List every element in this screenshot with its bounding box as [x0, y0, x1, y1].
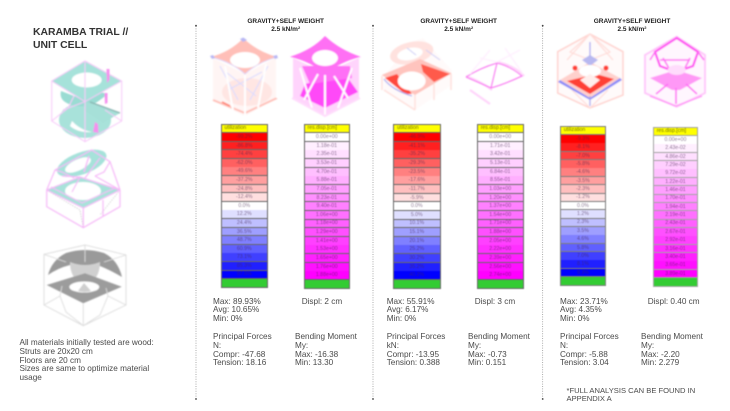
legend: column 1 displacement: 1.29e+00 [316, 229, 338, 235]
footnote: *FULL ANALYSIS CAN BE FOUND IN APPENDIX A [566, 386, 695, 403]
legend: column 1 displacement: 1.65e+00 [316, 255, 338, 261]
legend: column 2 displacement: res.disp.[cm] [481, 125, 510, 131]
legend: column 2 displacement: 1.03e+00 [489, 186, 511, 192]
stats: column 1 principal forces: Principal Forces N: Compr: -47.68 Tension: 18.16 [213, 332, 272, 367]
legend: column 3 displacement: 1.70e-01 [665, 195, 686, 201]
legend: column 1 utilization: -12.4% [236, 194, 252, 200]
legend: column 1 utilization: 97.5% [237, 271, 252, 277]
heading: column 1 load case: GRAVITY+SELF WEIGHT [247, 18, 324, 25]
legend: column 3 displacement: 2.43e-01 [665, 220, 686, 226]
legend: column 2 displacement: 0.00e+00 [489, 134, 511, 140]
legend: column 2 displacement: 2.22e+00 [489, 246, 511, 252]
legend: column 3 utilization: 3.5% [577, 228, 589, 234]
legend: column 1 displacement: 4.70e-01 [316, 169, 337, 175]
legend: column 2 displacement: 5.13e-01 [490, 160, 510, 166]
analysis model 2: displacement [466, 48, 524, 104]
legend: column 3 displacement: 9.72e-02 [665, 170, 686, 176]
legend: column 2 displacement: 1.71e-01 [490, 143, 510, 149]
legend: column 1 displacement [304, 124, 350, 289]
legend: column 2 utilization: -29.3% [409, 160, 425, 166]
legend: column 3 utilization: -9.3% [576, 136, 590, 142]
legend: column 1 displacement: 3.53e-01 [316, 160, 337, 166]
legend: column 3 utilization: -2.3% [576, 186, 590, 192]
legend: column 3 displacement: 2.43e-02 [665, 145, 686, 151]
legend: column 3 displacement: res.disp.[cm] [657, 128, 686, 134]
stats: column 1 displacement: Displ: 2 cm [302, 296, 342, 306]
icon: teal floors in pink cube [52, 61, 122, 142]
legend: column 1 utilization: -49.6% [236, 168, 252, 174]
legend: column 2 displacement: 1.88e+00 [489, 229, 511, 235]
legend: column 2 utilization: 25.2% [409, 246, 424, 252]
legend: column 1 utilization: utilization [224, 125, 246, 131]
legend: column 3 utilization: 9.3% [577, 270, 589, 276]
legend: column 2 utilization: 15.1% [409, 229, 424, 235]
text block: materials note: All materials initially tested are wood: Struts are 20x20 cm Floors are 20 cm Sizes are same to optimize material usage [20, 338, 154, 382]
legend: column 1 utilization: -86.8% [236, 143, 252, 149]
legend: column 1 displacement: res.disp.[cm] [308, 125, 337, 131]
legend: column 3 utilization: 7.0% [577, 253, 589, 259]
legend: column 1 displacement: 1.18e-01 [316, 143, 337, 149]
heading: column 3 load case: 2.5 kN/m2 [618, 25, 646, 33]
legend: column 1 displacement: 1.18e+00 [316, 220, 338, 226]
legend: column 3 displacement: 3.89e-01 [665, 271, 686, 277]
heading: column 2 load case: GRAVITY+SELF WEIGHT [420, 18, 497, 25]
analysis model 1: utilization [210, 38, 278, 116]
legend: column 1 displacement: 0.00e+00 [316, 134, 338, 140]
analysis model 3: displacement [645, 37, 705, 107]
legend: column 1 utilization: 24.4% [237, 220, 252, 226]
legend: column 3 displacement: 3.16e-01 [665, 246, 686, 252]
legend: column 1 utilization: 60.9% [237, 246, 252, 252]
legend: column 1 displacement: 2.35e-01 [316, 151, 337, 157]
legend: column 2 displacement: 1.20e+00 [489, 195, 511, 201]
legend: column 2 utilization: 30.2% [409, 255, 424, 261]
legend: column 3 displacement: 2.19e-01 [665, 212, 686, 218]
legend: column 1 displacement: 8.23e-01 [316, 195, 337, 201]
legend: column 2 utilization: 40.2% [409, 272, 424, 278]
legend: column 2 utilization [393, 124, 440, 289]
legend: column 1 utilization: 12.2% [237, 211, 252, 217]
legend: column 2 displacement: 1.37e+00 [489, 203, 511, 209]
legend: column 1 utilization: 85.3% [237, 263, 252, 269]
legend: column 2 utilization: -46.9% [409, 134, 425, 140]
legend: column 1 displacement: 1.53e+00 [316, 246, 338, 252]
legend: column 3 displacement: 4.86e-02 [665, 154, 686, 160]
stats: column 1 bending moment: Bending Moment My: Max: -16.38 Min: 13.30 [295, 332, 357, 367]
legend: column 3 displacement: 7.29e-02 [665, 162, 686, 168]
legend: column 3 utilization: -7.0% [576, 153, 590, 159]
legend: column 1 utilization [220, 124, 268, 288]
legend: column 2 displacement: 2.56e+00 [489, 264, 511, 270]
analysis model 2: utilization [382, 38, 452, 110]
legend: column 3 utilization: 4.6% [577, 236, 589, 242]
analysis model 1: displacement [290, 36, 361, 116]
legend: column 3 utilization: 1.2% [577, 211, 589, 217]
legend: column 2 utilization: 20.1% [409, 238, 424, 244]
analysis model 3: utilization [558, 34, 623, 108]
legend: column 2 displacement [477, 124, 524, 289]
legend: column 3 utilization: 0.0% [577, 203, 589, 209]
legend: column 2 displacement: 1.71e+00 [489, 220, 511, 226]
legend: column 2 displacement: 1.54e+00 [489, 212, 511, 218]
legend: column 3 displacement: 2.67e-01 [665, 229, 686, 235]
icon: grey surface model [44, 245, 126, 326]
stats: column 3 utilization: Max: 23.71% Avg: 4.35% Min: 0% [560, 296, 608, 323]
heading: column 3 load case: GRAVITY+SELF WEIGHT [594, 18, 670, 25]
legend: column 2 utilization: 35.2% [409, 264, 424, 270]
legend: column 2 displacement: 2.39e+00 [489, 255, 511, 261]
stats: column 3 displacement: Displ: 0.40 cm [648, 296, 700, 306]
heading: column 2 load case [420, 18, 497, 33]
stats: column 2 utilization: Max: 55.91% Avg: 6.17% Min: 0% [387, 296, 434, 323]
heading: column 1 load case [247, 18, 324, 33]
legend: column 1 utilization: 0.0% [238, 203, 250, 209]
legend: column 2 utilization: -35.2% [409, 151, 425, 157]
legend: column 3 displacement: 1.46e-01 [665, 187, 686, 193]
legend: column 3 utilization: utilization [564, 127, 585, 133]
legend: column 1 utilization: -24.8% [236, 186, 252, 192]
legend: column 3 utilization: -1.2% [576, 194, 590, 200]
legend: column 2 utilization: 0.0% [411, 203, 423, 209]
stats: column 2 principal forces: Principal Forces kN: Compr: -13.95 Tension: 0.388 [387, 332, 445, 367]
legend: column 3 utilization: 2.3% [577, 219, 589, 225]
legend: column 1 utilization: -62.0% [236, 160, 252, 166]
legend: column 2 utilization: 10.1% [409, 220, 424, 226]
legend: column 3 displacement: 2.92e-01 [665, 237, 686, 243]
stats: column 2 bending moment: Bending Moment My: Max: -0.73 Min: 0.151 [468, 332, 530, 367]
legend: column 1 displacement: 1.06e+00 [316, 212, 338, 218]
legend: column 3 displacement [653, 127, 698, 287]
legend: column 3 displacement: 3.65e-01 [665, 262, 686, 268]
legend: column 2 utilization: -23.5% [409, 169, 425, 175]
heading: column 2 load case: 2.5 kN/m2 [444, 25, 473, 33]
legend: column 3 utilization [560, 126, 606, 286]
stats: column 3 bending moment: Bending Moment My: Max: -2.20 Min: 2.279 [641, 332, 703, 367]
stats: column 1 utilization: Max: 89.93% Avg: 10.65% Min: 0% [213, 296, 261, 323]
legend: column 1 displacement: 9.40e-01 [316, 203, 337, 209]
legend: column 3 utilization: -3.5% [576, 178, 590, 184]
legend: column 3 utilization: -8.1% [576, 144, 590, 150]
legend: column 1 utilization: -37.2% [236, 177, 252, 183]
legend: column 2 utilization: 5.0% [411, 212, 423, 218]
legend: column 1 displacement: 5.88e-01 [316, 177, 337, 183]
stats: column 3 principal forces: Principal Forces N: Compr: -5.88 Tension: 3.04 [560, 332, 619, 367]
legend: column 3 displacement: 0.00e+00 [665, 137, 686, 143]
stats: column 2 displacement: Displ: 3 cm [475, 296, 515, 306]
legend: column 2 utilization: -41.1% [409, 143, 425, 149]
heading: column 1 load case: 2.5 kN/m2 [271, 25, 300, 33]
legend: column 1 utilization: 73.1% [237, 254, 252, 260]
legend: column 3 utilization: 5.8% [577, 244, 589, 250]
legend: column 1 displacement: 1.41e+00 [316, 238, 338, 244]
legend: column 2 displacement: 2.74e+00 [489, 272, 511, 278]
legend: column 2 displacement: 2.05e+00 [489, 238, 511, 244]
legend: column 1 displacement: 1.76e+00 [316, 264, 338, 270]
legend: column 2 utilization: -11.7% [409, 186, 425, 192]
legend: column 2 displacement: 3.42e-01 [490, 151, 510, 157]
legend: column 1 utilization: -99.2% [236, 134, 252, 140]
legend: column 1 utilization: -74.4% [236, 151, 252, 157]
divider lines between columns [195, 25, 544, 400]
legend: column 2 displacement: 6.84e-01 [490, 169, 510, 175]
legend: column 1 utilization: 48.7% [237, 237, 252, 243]
legend: column 2 utilization: utilization [397, 125, 419, 131]
heading: column 3 load case [594, 18, 670, 33]
legend: column 3 displacement: 1.22e-01 [665, 179, 686, 185]
legend: column 2 utilization: -5.9% [410, 195, 424, 201]
icon: structural frame with teal floors [47, 144, 120, 228]
legend: column 3 utilization: 8.1% [577, 261, 589, 267]
legend: column 1 displacement: 7.05e-01 [316, 186, 337, 192]
legend: column 2 displacement: 8.55e-01 [490, 177, 510, 183]
legend: column 2 utilization: -17.6% [409, 177, 425, 183]
legend: column 3 displacement: 3.40e-01 [665, 254, 686, 260]
legend: column 3 displacement: 1.94e-01 [665, 204, 686, 210]
legend: column 1 utilization: 36.5% [237, 229, 252, 235]
legend: column 3 utilization: -4.6% [576, 169, 590, 175]
legend: column 3 utilization: -5.8% [576, 161, 590, 167]
legend: column 1 displacement: 1.88e+00 [316, 272, 338, 278]
title: KARAMBA TRIAL // UNIT CELL [33, 26, 128, 50]
